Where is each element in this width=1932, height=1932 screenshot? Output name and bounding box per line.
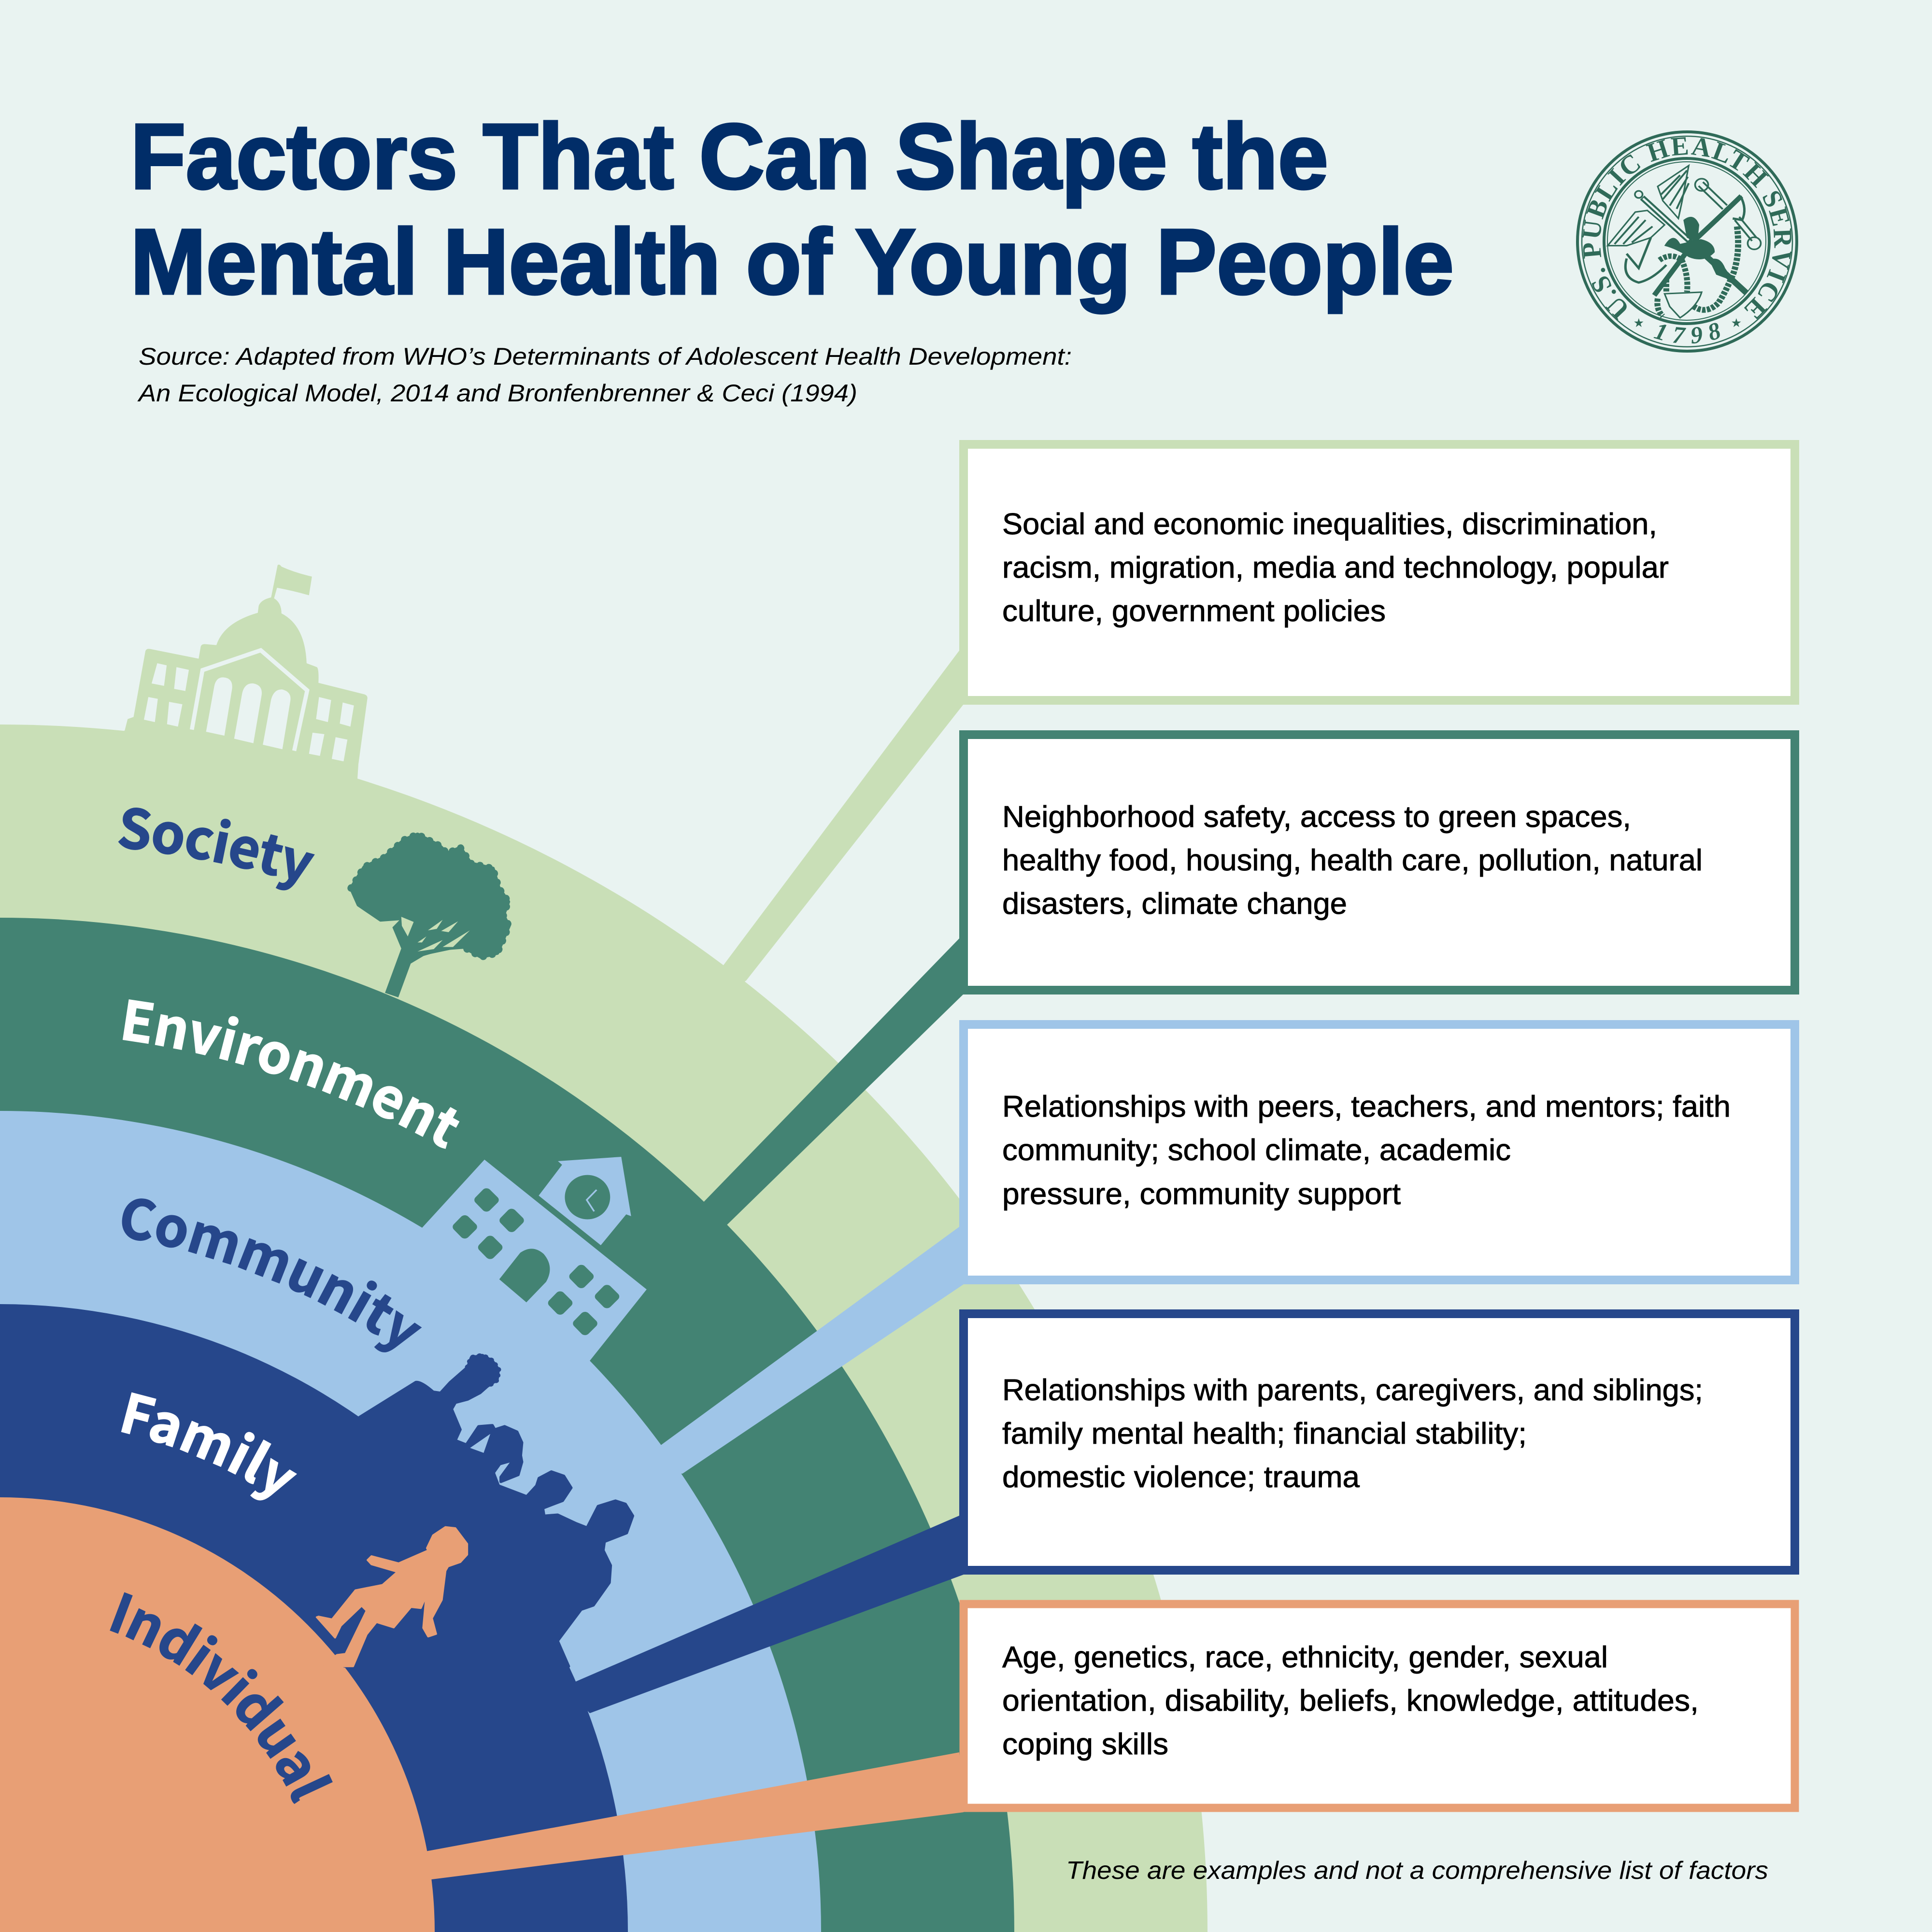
box: community factors: [964, 1024, 1795, 1280]
icon: school building: [413, 1157, 647, 1369]
footnote: These are examples and not a comprehensive list of factors: [1066, 1857, 1768, 1885]
label: Society: Society: [118, 808, 315, 891]
box: community factors: Relationships with peers, teachers, and mentors; faith: [1002, 1090, 1731, 1123]
box: community factors: community; school climate, academic: [1002, 1134, 1511, 1167]
icon: U.S. Public Health Service seal: 1798: [1654, 323, 1720, 344]
box: community factors: pressure, community support: [1002, 1178, 1401, 1211]
title: Mental Health of Young People: [130, 210, 1454, 313]
box: family factors: [964, 1314, 1795, 1570]
connector: community: [650, 1227, 964, 1474]
box: environment factors: Neighborhood safety, access to green spaces,: [1002, 800, 1631, 834]
box: individual factors: [964, 1604, 1795, 1808]
box: environment factors: healthy food, housing, health care, pollution, natural: [1002, 844, 1703, 877]
ring: society: [0, 724, 1208, 1932]
box: society factors: Social and economic inequalities, discrimination,: [1002, 508, 1657, 541]
source citation: An Ecological Model, 2014 and Bronfenbrenner & Ceci (1994): [137, 380, 857, 407]
icon: U.S. Public Health Service seal: U.S. PUBLIC HEALTH SERVICE: [1582, 137, 1791, 320]
box: individual factors: coping skills: [1002, 1728, 1168, 1761]
box: society factors: [964, 444, 1795, 700]
label: Family: Family: [121, 1392, 297, 1500]
box: individual factors: orientation, disability, beliefs, knowledge, attitudes,: [1002, 1684, 1699, 1718]
box: individual factors: Age, genetics, race, ethnicity, gender, sexual: [1002, 1641, 1608, 1674]
box: society factors: culture, government policies: [1002, 595, 1386, 628]
connector: individual: [415, 1752, 964, 1881]
box: family factors: family mental health; financial stability;: [1002, 1417, 1527, 1450]
icon: family silhouette: [344, 1355, 633, 1666]
source citation: [137, 343, 1072, 407]
icon: capitol building: [114, 565, 368, 788]
ring: individual: [0, 1497, 435, 1932]
connector: family: [565, 1516, 964, 1713]
box: society factors: racism, migration, media and technology, popular: [1002, 551, 1669, 584]
icon: tree: [351, 835, 509, 997]
icon: child silhouette: [317, 1527, 467, 1666]
label: Environment: Environment: [123, 999, 460, 1149]
ring: environment: [0, 918, 1014, 1932]
icon: U.S. Public Health Service seal: ★: [1732, 317, 1741, 329]
connector: society: [718, 651, 964, 985]
title: Factors That Can Shape the: [130, 104, 1328, 208]
box: family factors: domestic violence; trauma: [1002, 1461, 1360, 1494]
connector: environment: [694, 938, 964, 1229]
label: Individual: Individual: [110, 1592, 333, 1804]
title: [130, 104, 1454, 313]
source citation: Source: Adapted from WHO’s Determinants of Adolescent Health Development:: [139, 343, 1072, 370]
box: family factors: Relationships with parents, caregivers, and siblings;: [1002, 1374, 1703, 1407]
box: environment factors: disasters, climate change: [1002, 887, 1347, 921]
ring: family: [0, 1304, 628, 1932]
ring: community: [0, 1111, 821, 1932]
icon: U.S. Public Health Service seal: ★: [1634, 317, 1644, 329]
label: Community: Community: [122, 1198, 422, 1352]
box: environment factors: [964, 735, 1795, 990]
concentric rings: [0, 724, 1208, 1932]
